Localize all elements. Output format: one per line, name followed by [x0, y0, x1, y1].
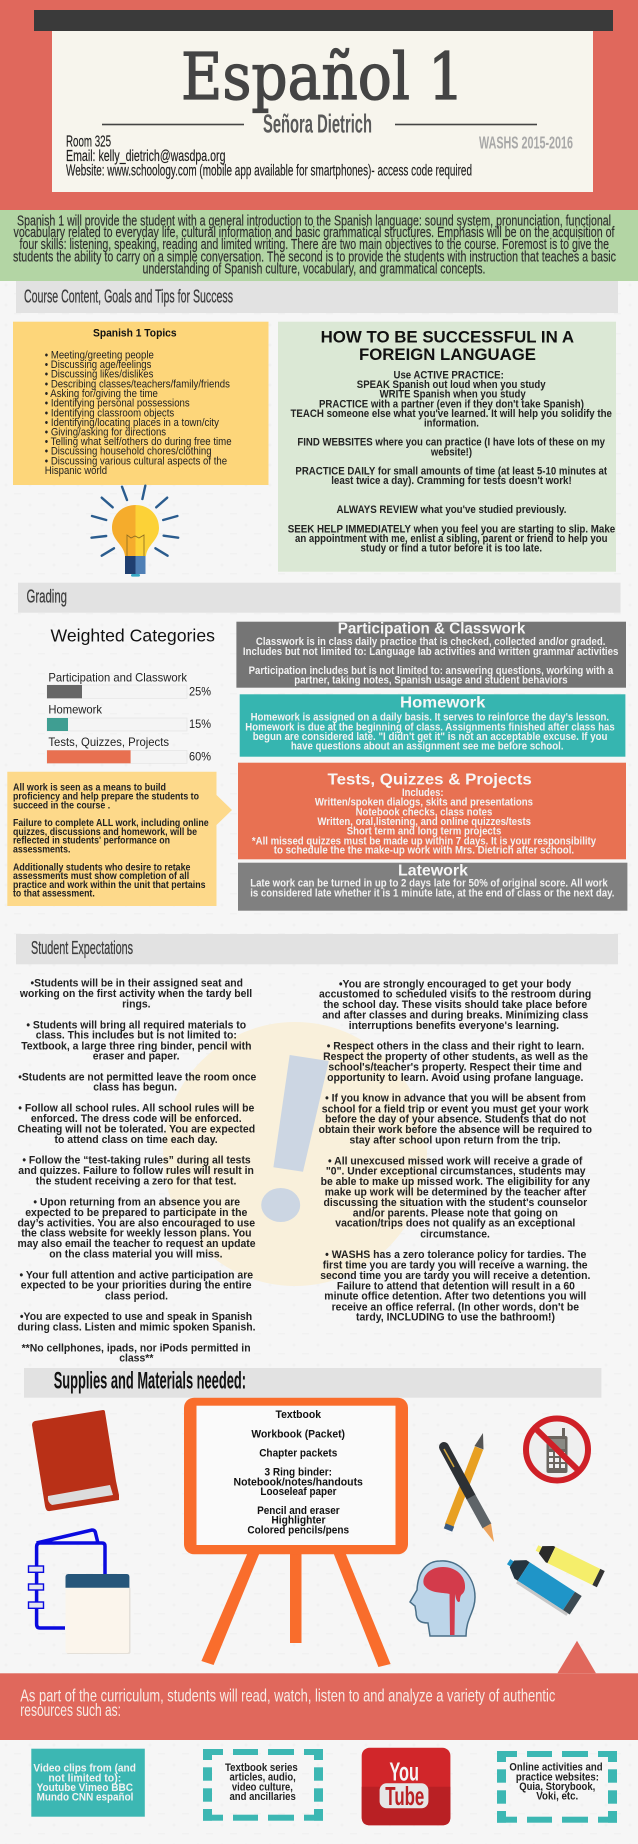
text block: expectations left column: and quizzes. Failure to follow rules will result in: [18, 1165, 254, 1177]
contact details: Room 325: [66, 134, 111, 151]
supplies list: Chapter packets: [259, 1448, 337, 1460]
panel: tests, quizzes and projects: Tests, Quizzes & Projects: [328, 772, 532, 789]
panel: tests, quizzes and projects: Short term and long term projects: [347, 826, 501, 838]
panel: participation and classwork: partner, taking notes, Spanish usage and student behaviors: [294, 675, 568, 687]
topics list: [45, 349, 232, 477]
text block: expectations left column: expected to be prepared to participate in the: [25, 1207, 247, 1219]
panel: latework: Latework: [398, 862, 468, 879]
callout: all work: practice and work within the unit that pertains: [13, 879, 206, 891]
text block: expectations left column: • Your full attention and active participation are: [20, 1269, 253, 1281]
text block: expectations right column: Respect the property of other students, as well as the: [323, 1051, 588, 1063]
text block: expectations right column: • If you know in advance that you will be absent from: [325, 1093, 586, 1105]
text block: expectations left column: on the class material you will miss.: [49, 1248, 223, 1260]
bar: participation 25%: 25%: [189, 684, 211, 698]
icon: pencil and pen: [444, 1433, 494, 1542]
text block: expectations left column: rings.: [122, 999, 151, 1011]
callout: all work: to that assessment.: [13, 888, 95, 900]
panel: homework: have questions about an assignment see me before school.: [291, 741, 564, 753]
text block: expectations left column: eraser and paper.: [93, 1051, 180, 1063]
resources banner: resources such as:: [20, 1700, 121, 1720]
callout: all work: proficiency and help prepare the students to: [13, 791, 199, 803]
text block: expectations right column: accustomed to scheduled visits to the restroom during: [319, 989, 591, 1001]
icon: no cellphones: [526, 1418, 588, 1480]
resource: textbook series: Textbook series: [225, 1762, 298, 1774]
panel: homework: Homework: [400, 695, 486, 712]
panel: Spanish 1 topics: [13, 322, 268, 485]
text block: expectations left column: the student receiving a zero for that test.: [36, 1175, 236, 1187]
text block: expectations right column: second time you are tardy you will receive a detention.: [320, 1270, 590, 1282]
callout: all work: reflected in students' performance on: [13, 835, 170, 847]
text block: expectations right column: • Respect others in the class and their right to learn.: [327, 1041, 584, 1053]
text block: expectations left column: day’s activities. You are also encouraged to use: [18, 1217, 255, 1229]
panel: tests, quizzes and projects: [238, 763, 626, 859]
text block: expectations right column: the school day. These visits should take place before: [324, 999, 587, 1011]
topics list: • Identifying/locating places in a town/city: [45, 417, 219, 429]
panel: participation and classwork: Participation & Classwork: [338, 620, 525, 637]
bar: homework 15%: [47, 703, 211, 731]
icon: highlighters: [501, 1540, 605, 1617]
text block: expectations left column: Textbook, a large three ring binder, pencil with: [21, 1040, 252, 1052]
text block: expectations left column: **No cellphones, ipads, nor iPods permitted in: [22, 1342, 251, 1354]
success heading: FOREIGN LANGUAGE: [359, 346, 536, 364]
text block: expectations left column: • Follow all school rules. All school rules will be: [18, 1103, 254, 1115]
text block: expectations left column: the class website for weekly lesson plans. You: [21, 1228, 252, 1240]
resource: online activities: Online activities and: [509, 1762, 603, 1774]
text block: expectations right column: first time you are tardy you will receive a warning. the: [323, 1259, 588, 1271]
resource: online activities: [497, 1751, 617, 1823]
success tips: SPEAK Spanish out loud when you study: [357, 379, 546, 391]
success tips: information.: [424, 418, 479, 430]
topics list: • Telling what self/others do during free time: [45, 436, 232, 448]
text block: expectations right column: vacation/trips does not qualify as an exceptional: [335, 1218, 575, 1230]
topics list: • Asking for/giving the time: [45, 388, 158, 400]
resource: video clips: Video clips from (and: [33, 1763, 136, 1775]
resource: textbook series: and ancillaries: [230, 1791, 296, 1803]
text block: expectations right column: tardy, INCLUDING to use the bathroom!): [356, 1312, 555, 1324]
text block: expectations left column: •Students are not permitted leave the room once: [18, 1071, 256, 1083]
text block: expectations left column: Cheating will not be tolerated. You are expected: [18, 1123, 255, 1135]
bar: tests 60%: [47, 735, 211, 764]
text block: expectations left column: working on the first activity when the tardy bell: [19, 988, 252, 1000]
panel: participation and classwork: [236, 620, 626, 688]
resource: video clips: Youtube Vimeo BBC: [37, 1782, 133, 1794]
text block: expectations right column: circumstance.: [420, 1228, 490, 1240]
panel: latework: [238, 862, 627, 911]
callout: all work: assessments must show completion of all: [13, 870, 189, 882]
text block: expectations right column: discussing the situation with the student's counselor: [324, 1197, 588, 1209]
topics list: • Giving/asking for directions: [45, 426, 167, 438]
resource: video clips: not limited to):: [48, 1772, 121, 1784]
text block: expectations left column: to attend class on time each day.: [54, 1134, 218, 1146]
bar: tests 60%: 60%: [189, 750, 211, 764]
text block: expectations right column: make up work will be determined by the teacher after: [325, 1187, 587, 1199]
success tips: least twice a day). Cramming for tests doesn't work!: [331, 475, 572, 487]
text block: expectations right column: and/or parents. Please note that going on: [353, 1207, 558, 1219]
success tips: study or find a tutor before it is too late.: [360, 543, 542, 555]
text block: expectations right column: • All unexcused missed work will receive a grade of: [328, 1155, 583, 1167]
callout: all work: quizzes, discussions and homework, will be: [13, 826, 197, 838]
header banner: [0, 0, 638, 210]
success tips: website!): [430, 446, 472, 458]
section heading: supplies and materials: [24, 1367, 601, 1398]
text block: expectations right column: school for a field trip or event you must get your work: [322, 1103, 590, 1115]
school year: WASHS 2015-2016: [479, 133, 573, 153]
text block: expectations left column: enforced. The dress code will be enforced.: [31, 1113, 242, 1125]
resource: textbook series: [203, 1749, 323, 1821]
text block: expectations right column: receive an office referral. (In other words, don't be: [332, 1301, 579, 1313]
text block: expectations left column: during class. Listen and mimic spoken Spanish.: [18, 1321, 256, 1333]
topics list: • Discussing various cultural aspects of the: [45, 455, 227, 467]
text block: expectations right column: be able to make up missed work. The eligibility for any: [321, 1176, 591, 1188]
text block: expectations left column: •Students will be in their assigned seat and: [30, 978, 243, 990]
resource: video clips: Mundo CNN español: [37, 1792, 133, 1804]
supplies list: Highlighter: [271, 1515, 326, 1527]
resource: online activities: Voki, etc.: [536, 1791, 578, 1803]
section heading: grading: [18, 583, 620, 613]
supplies list: Workbook (Packet): [251, 1428, 345, 1440]
section heading: supplies and materials: Supplies and Materials needed:: [54, 1367, 246, 1394]
bar: participation 25%: Participation and Classwork: [48, 670, 188, 684]
success tips: [288, 369, 615, 555]
supplies list: 3 Ring binder:: [264, 1467, 332, 1479]
panel: tests, quizzes and projects: Notebook checks, class notes: [356, 806, 492, 818]
text block: expectations right column: stay after school upon return from the trip.: [350, 1134, 561, 1146]
icon: YouTube logo: You: [389, 1757, 419, 1787]
resource: online activities: Quia, Storybook,: [519, 1781, 595, 1793]
resource: video clips: [31, 1749, 145, 1817]
text block: expectations right column: minute office detention. After two detentions you will: [324, 1291, 586, 1303]
resource: textbook series: articles, audio,: [230, 1772, 296, 1784]
panel: homework: [240, 694, 625, 757]
text block: expectations left column: expected to be your priorities during the entire: [21, 1280, 251, 1292]
success heading: [321, 329, 574, 364]
topics list: • Describing classes/teachers/family/friends: [45, 378, 230, 390]
success tips: PRACTICE with a partner (even if they don't take Spanish): [319, 398, 584, 410]
course introduction band: understanding of Spanish culture, vocabulary, and grammatical concepts.: [142, 260, 486, 277]
success tips: Use ACTIVE PRACTICE:: [394, 369, 504, 381]
text block: expectations right column: obtain their work before the absence will be required to: [319, 1124, 592, 1136]
teacher name: Señora Dietrich: [263, 109, 372, 139]
topics heading: Spanish 1 Topics: [93, 328, 177, 340]
supplies list: Textbook: [276, 1409, 322, 1421]
panel: tests, quizzes and projects: *All missed quizzes must be made up within 7 days. It is your responsibility: [252, 835, 597, 847]
icon: head with brain: [410, 1561, 475, 1636]
callout: all work: Failure to complete ALL work, including online: [13, 817, 209, 829]
callout: all work: All work is seen as a means to build: [13, 782, 166, 794]
text block: expectations left column: may also email the teacher to request an update: [18, 1238, 256, 1250]
contact details: Email: kelly_dietrich@wasdpa.org: [66, 148, 226, 165]
success tips: WRITE Spanish when you study: [380, 389, 526, 401]
text block: expectations left column: • Upon returning from an absence you are: [33, 1196, 240, 1208]
section heading: student expectations: Student Expectations: [31, 938, 133, 958]
section heading: course content: Course Content, Goals and Tips for Success: [24, 287, 233, 307]
text block: expectations left column: class. This includes but is not limited to:: [36, 1030, 237, 1042]
title: Español 1: [181, 40, 464, 115]
icon: YouTube logo: Tube: [385, 1781, 424, 1811]
section heading: course content: [16, 281, 618, 313]
supplies list: [234, 1409, 363, 1536]
icon: light bulb: [92, 486, 178, 577]
icon: exclamation mark watermark: [163, 1022, 427, 1286]
icon: YouTube logo: [362, 1748, 450, 1825]
topics list: • Discussing household chores/clothing: [45, 446, 212, 458]
icon: ring binder and notepad: [28, 1530, 130, 1654]
bar: tests 60%: Tests, Quizzes, Projects: [48, 735, 169, 749]
panel: tests, quizzes and projects: Written, oral,listening, and online quizzes/tests: [317, 816, 531, 828]
bar: homework 15%: Homework: [48, 703, 103, 717]
text block: expectations right column: opportunity to learn. Avoid using profane language.: [327, 1072, 583, 1084]
contact details: [66, 134, 472, 180]
bar: participation 25%: [47, 670, 211, 698]
chart title: Weighted Categories: [50, 626, 215, 646]
callout: all work: [7, 772, 232, 906]
text block: expectations right column: Failure to attend that detention will result in a 60: [337, 1280, 575, 1292]
text block: expectations right column: school's/teacher's property. Respect their time and: [328, 1061, 582, 1073]
chart: weighted categories: [47, 626, 215, 764]
supplies list: Pencil and eraser: [257, 1505, 340, 1517]
supplies list: Colored pencils/pens: [247, 1524, 349, 1536]
callout: all work: assessments.: [13, 844, 70, 856]
callout: all work: succeed in the course .: [13, 799, 110, 811]
text block: expectations left column: • Follow the “test-taking rules” during all tests: [22, 1155, 251, 1167]
text block: expectations left column: • Students will bring all required materials to: [26, 1019, 246, 1031]
supplies list: Notebook/notes/handouts: [234, 1476, 363, 1488]
text block: expectations left column: [18, 978, 256, 1365]
topics list: • Identifying classroom objects: [45, 407, 175, 419]
panel: tests, quizzes and projects: Includes:: [402, 787, 444, 799]
text block: expectations right column: interruptions benefits everyone's learning.: [349, 1020, 559, 1032]
easel with supplies list: [184, 1398, 408, 1667]
callout: all work: Additionally students who desire to retake: [13, 861, 191, 873]
panel: tests, quizzes and projects: to schedule the the make-up work with Mrs. Dietrich after school.: [274, 845, 574, 857]
section heading: student expectations: [16, 934, 618, 964]
bar: homework 15%: 15%: [189, 717, 211, 731]
text block: expectations left column: •You are expected to use and speak in Spanish: [20, 1311, 252, 1323]
section heading: grading: Grading: [26, 587, 67, 607]
icon: red book: [32, 1410, 119, 1511]
topics list: • Identifying personal possessions: [45, 398, 190, 410]
resource: online activities: practice websites:: [516, 1771, 599, 1783]
panel: tests, quizzes and projects: Written/spoken dialogs, skits and presentations: [315, 797, 533, 809]
supplies list: Looseleaf paper: [260, 1486, 337, 1498]
course introduction band: [0, 210, 638, 281]
resource: textbook series: video culture,: [232, 1781, 293, 1793]
topics list: Hispanic world: [45, 465, 107, 477]
text block: expectations right column: "0". Under exceptional circumstances, students may: [326, 1166, 586, 1178]
text block: expectations right column: and after classes and during breaks. Minimizing class: [322, 1009, 588, 1021]
text block: expectations left column: class period.: [105, 1290, 168, 1302]
topics list: • Meeting/greeting people: [45, 349, 154, 361]
text block: expectations right column: •You are strongly encouraged to get your body: [339, 978, 572, 990]
success tips: ALWAYS REVIEW what you've studied previously.: [336, 504, 566, 516]
text block: expectations left column: class has begun.: [93, 1082, 177, 1094]
text block: expectations right column: [319, 978, 592, 1324]
panel: how to be successful: [278, 322, 616, 572]
success heading: HOW TO BE SUCCESSFUL IN A: [321, 329, 574, 347]
text block: expectations right column: • WASHS has a zero tolerance policy for tardies. The: [325, 1249, 586, 1261]
text block: expectations left column: class**: [119, 1353, 154, 1365]
topics list: • Discussing likes/dislikes: [45, 369, 154, 381]
resources banner: [0, 1641, 638, 1740]
topics list: • Discussing age/feelings: [45, 359, 152, 371]
text block: expectations right column: before the day of your absence. Students that do not: [325, 1114, 586, 1126]
